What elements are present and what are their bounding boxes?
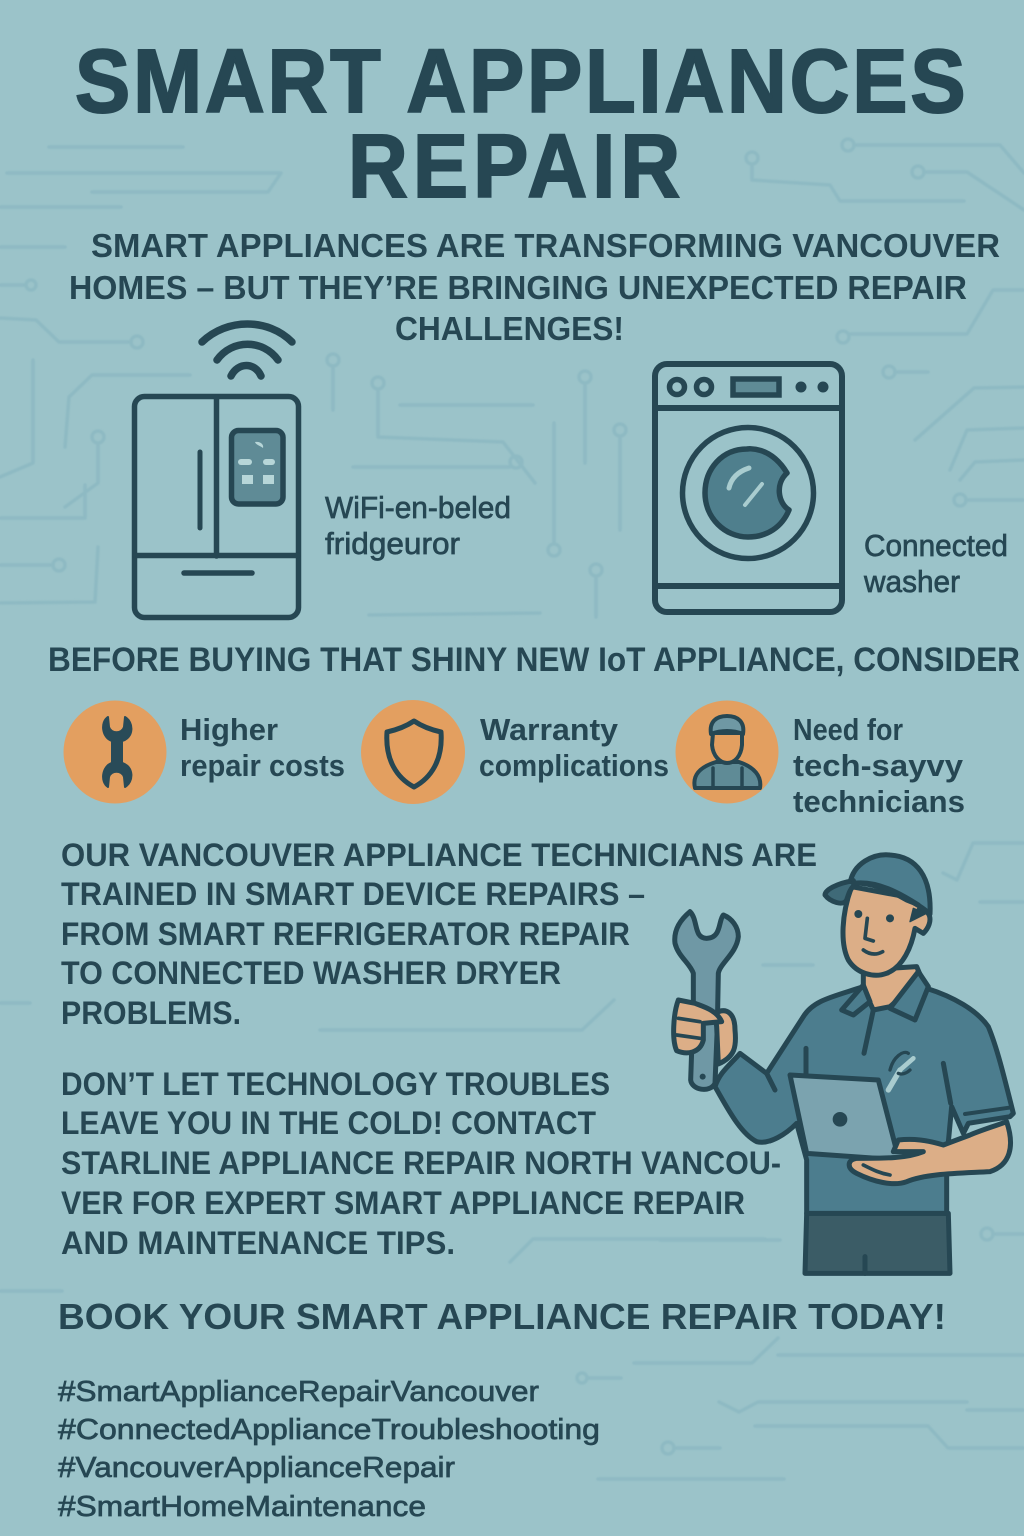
consideration: warranty complications	[361, 700, 669, 804]
label: warranty complications: Warranty	[480, 712, 619, 747]
label: fridge: WiFi-en-beled	[325, 490, 511, 525]
head	[843, 887, 930, 975]
label: washer	[863, 528, 1008, 599]
label: higher repair costs: Higher	[180, 712, 278, 747]
icon: connected washer	[655, 364, 842, 612]
text block: technicians trained: PROBLEMS.	[61, 995, 241, 1031]
label: washer: Connected	[864, 528, 1008, 563]
shirt torso	[715, 987, 1013, 1213]
consideration: higher repair costs	[64, 700, 345, 804]
hashtags: #ConnectedApplianceTroubleshooting	[58, 1414, 600, 1446]
label: tech-savvy technicians	[793, 712, 965, 819]
intro text: CHALLENGES!	[395, 310, 624, 347]
neck	[863, 967, 922, 1010]
text block: technicians trained	[61, 837, 817, 1031]
label: washer: washer	[863, 564, 960, 599]
hashtags	[58, 1376, 600, 1523]
title: SMART APPLIANCES	[75, 32, 966, 132]
left hand	[674, 1000, 736, 1064]
label: higher repair costs: repair costs	[180, 748, 345, 783]
intro text	[69, 227, 1000, 347]
call to action: BOOK YOUR SMART APPLIANCE REPAIR TODAY!	[58, 1296, 946, 1337]
text block: contact starline: DON’T LET TECHNOLOGY TROUBLES	[61, 1066, 610, 1102]
title: REPAIR	[348, 117, 680, 217]
consideration: tech-savvy technicians	[676, 700, 965, 819]
trousers	[805, 1213, 950, 1273]
icon: wifi signal	[202, 324, 292, 376]
text block: contact starline: VER FOR EXPERT SMART APPLIANCE REPAIR	[61, 1185, 745, 1221]
hashtags: #SmartApplianceRepairVancouver	[58, 1376, 539, 1408]
wrench	[675, 912, 738, 1089]
hashtags: #VancouverApplianceRepair	[58, 1452, 455, 1484]
icon: smart fridge	[134, 396, 298, 618]
sleeve hem	[965, 1107, 1012, 1114]
cap	[825, 855, 930, 914]
pocket wrench logo	[888, 1052, 913, 1090]
text block: contact starline: STARLINE APPLIANCE REPAIR NORTH VANCOU-	[61, 1145, 781, 1181]
intro text: HOMES – BUT THEY’RE BRINGING UNEXPECTED REPAIR	[69, 269, 967, 306]
text block: contact starline: AND MAINTENANCE TIPS.	[61, 1225, 455, 1261]
right forearm and hand	[849, 1122, 1011, 1184]
label: tech-savvy technicians: technicians	[793, 784, 965, 819]
icon: shield	[361, 700, 465, 804]
text block: technicians trained: OUR VANCOUVER APPLIANCE TECHNICIANS ARE	[61, 837, 817, 873]
label: higher repair costs	[180, 712, 345, 783]
hashtags: #SmartHomeMaintenance	[58, 1491, 426, 1523]
title	[75, 32, 966, 217]
label: warranty complications: complications	[479, 748, 669, 783]
illustration: technician with wrench and laptop	[674, 855, 1013, 1273]
icon: technician	[676, 700, 778, 804]
text block: contact starline	[61, 1066, 781, 1261]
text block: technicians trained: FROM SMART REFRIGERATOR REPAIR	[61, 916, 630, 952]
icon: wrench	[64, 700, 166, 804]
label: fridge: fridgeuror	[325, 526, 460, 561]
text block: technicians trained: TO CONNECTED WASHER DRYER	[61, 955, 561, 991]
label: tech-savvy technicians: tech-sayvy	[793, 748, 964, 783]
label: tech-savvy technicians: Need for	[793, 712, 903, 747]
text block: technicians trained: TRAINED IN SMART DEVICE REPAIRS –	[61, 876, 645, 912]
shirt details	[767, 1010, 951, 1103]
label: fridge	[325, 490, 511, 561]
intro text: SMART APPLIANCES ARE TRANSFORMING VANCOUVER	[91, 227, 1000, 264]
laptop	[790, 1075, 917, 1160]
label: warranty complications	[479, 712, 669, 783]
text block: contact starline: LEAVE YOU IN THE COLD! CONTACT	[61, 1105, 596, 1141]
collar	[842, 972, 928, 1020]
